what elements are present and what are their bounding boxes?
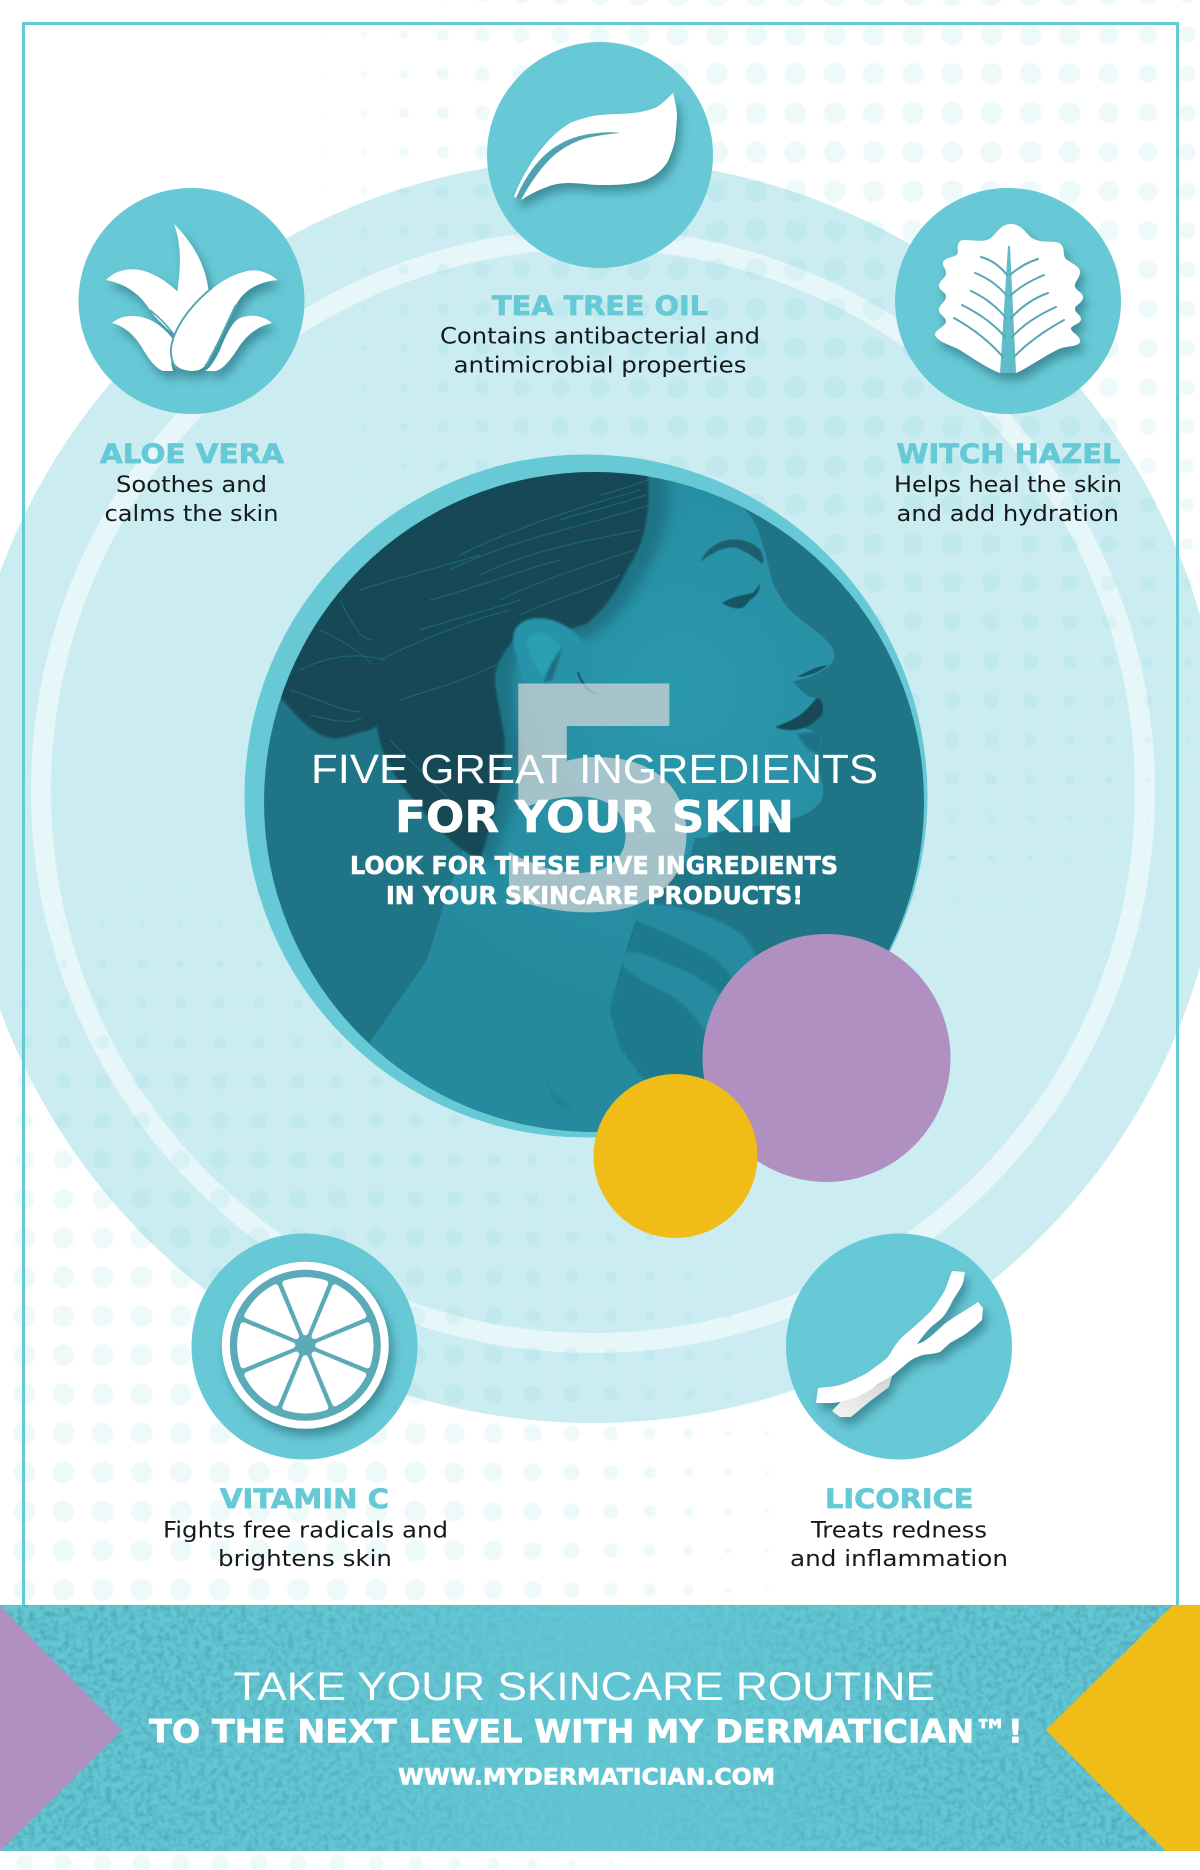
vitamin c description line two: brightens skin <box>218 1546 392 1572</box>
licorice title: LICORICE <box>825 1484 974 1515</box>
tea tree oil title: TEA TREE OIL <box>492 291 708 322</box>
ear inner shadow <box>528 634 560 677</box>
yellow arrow shape <box>1046 1605 1200 1851</box>
subheading line one: LOOK FOR THESE FIVE INGREDIENTS <box>350 851 838 880</box>
ingredient: tea tree oil <box>440 42 760 378</box>
banner line two: TO THE NEXT LEVEL WITH MY DERMATICIAN™! <box>149 1712 1023 1750</box>
vitamin c description line one: Fights free radicals and <box>163 1518 448 1544</box>
outer pale circle <box>0 159 1200 1423</box>
hand under chin <box>690 838 706 856</box>
witch hazel description line two: and add hydration <box>896 501 1119 527</box>
woman in profile <box>250 455 835 1150</box>
banner texture <box>0 1605 1200 1851</box>
upper lip <box>775 698 823 730</box>
hair <box>280 472 650 860</box>
purple decorative circle <box>702 934 950 1182</box>
purple arrow shape <box>0 1606 122 1851</box>
central portrait <box>244 454 928 1150</box>
aloe vera description line two: calms the skin <box>104 501 278 527</box>
ingredient: vitamin c <box>163 1234 448 1572</box>
ingredient: aloe vera <box>78 188 304 527</box>
aloe vera description line one: Soothes and <box>116 472 267 498</box>
hand shadow between fingers <box>624 1052 646 1080</box>
heading line two: FOR YOUR SKIN <box>395 792 794 843</box>
banner line one: TAKE YOUR SKINCARE ROUTINE <box>234 1665 935 1709</box>
halftone dots: top right field <box>324 0 1196 899</box>
halftone dots: bottom left field <box>14 924 769 1870</box>
eye <box>722 584 760 608</box>
neck crease <box>549 1086 572 1108</box>
portrait photo circle <box>264 472 924 1132</box>
inner pale ring <box>41 239 1145 1343</box>
ingredient: licorice <box>786 1234 1012 1572</box>
icon badge: citrus slice <box>192 1234 418 1460</box>
icon badge: leaf <box>487 42 713 268</box>
finger two <box>622 952 720 1031</box>
tea tree oil description line two: antimicrobial properties <box>454 352 746 378</box>
hair strands <box>290 480 650 810</box>
aloe vera title: ALOE VERA <box>100 439 284 470</box>
icon badge: licorice root <box>786 1234 1012 1460</box>
banner website: WWW.MYDERMATICIAN.COM <box>398 1766 775 1790</box>
witch hazel title: WITCH HAZEL <box>896 439 1120 470</box>
ear <box>512 617 584 668</box>
skin: face, neck and shoulder <box>370 474 834 1132</box>
icon badge: aloe <box>78 188 304 414</box>
nostril <box>797 665 828 677</box>
lower lip <box>797 732 822 753</box>
hairline soft transition <box>480 470 656 860</box>
icon badge: scalloped leaf <box>895 188 1121 414</box>
big number 5: 5 <box>484 622 709 981</box>
ingredient: witch hazel <box>894 188 1122 527</box>
licorice description line one: Treats redness <box>810 1518 987 1544</box>
subheading line two: IN YOUR SKINCARE PRODUCTS! <box>386 881 803 910</box>
portrait teal border <box>244 454 928 1138</box>
eyebrow <box>700 540 763 564</box>
bottom banner <box>0 1605 1200 1851</box>
banner background <box>0 1605 1200 1851</box>
yellow decorative circle <box>594 1074 758 1238</box>
vitamin c title: VITAMIN C <box>220 1484 389 1515</box>
tea tree oil description line one: Contains antibacterial and <box>440 324 760 350</box>
heading line one: FIVE GREAT INGREDIENTS <box>311 746 878 792</box>
finger one <box>636 904 756 978</box>
licorice description line two: and inflammation <box>790 1546 1008 1572</box>
witch hazel description line one: Helps heal the skin <box>894 472 1122 498</box>
